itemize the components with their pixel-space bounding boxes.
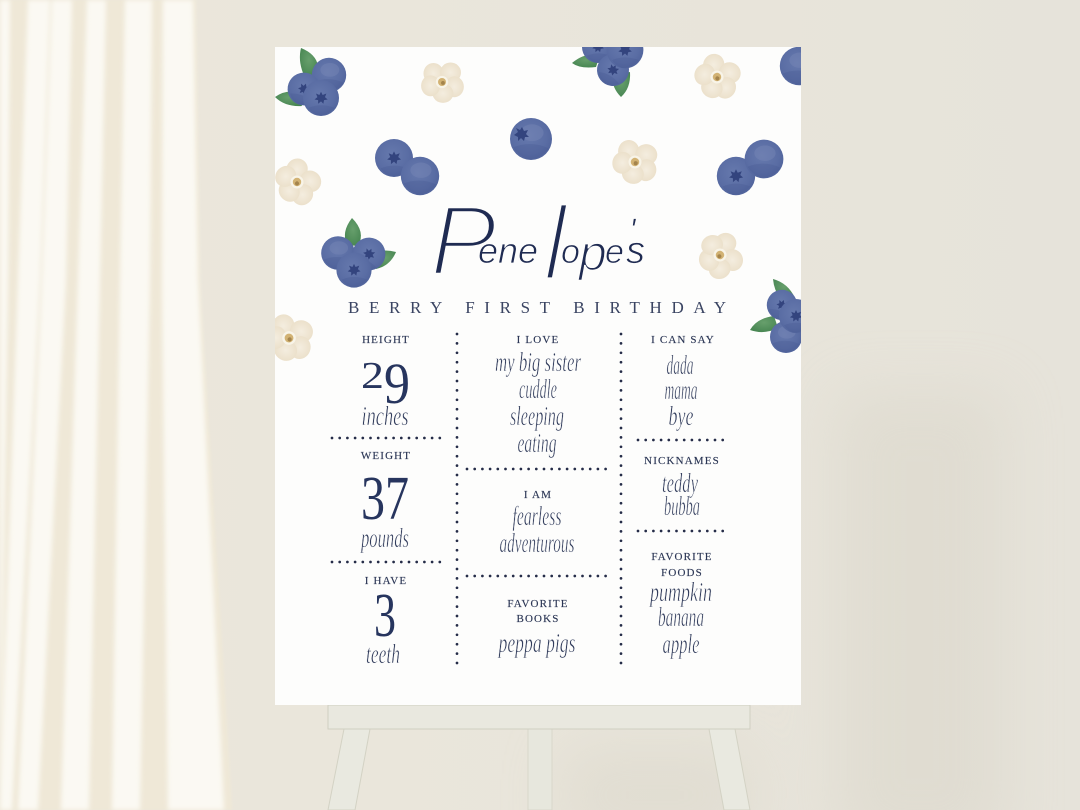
I can say block: mama	[664, 375, 698, 405]
I love block: sleeping	[510, 401, 564, 431]
favorite foods block: apple	[662, 629, 700, 659]
berry pair: left	[375, 139, 439, 195]
flower: top	[421, 63, 464, 103]
nicknames block: teddy	[662, 468, 698, 498]
title: s	[626, 230, 645, 272]
berry: top right	[780, 47, 801, 86]
I love block: I LOVE	[517, 334, 559, 346]
teeth block: 3	[374, 582, 396, 650]
height block: inches	[362, 401, 408, 431]
I can say block	[651, 334, 715, 431]
berry cluster: top centre	[572, 47, 644, 97]
easel right leg	[709, 729, 750, 810]
I can say block: bye	[668, 401, 694, 431]
weight block: WEIGHT	[361, 450, 411, 462]
favorite foods block: FOODS	[661, 567, 703, 579]
I can say block: dada	[666, 350, 694, 380]
easel middle leg	[528, 729, 552, 810]
favorite books block	[497, 598, 576, 658]
I love block: cuddle	[519, 374, 557, 404]
I can say block: I CAN SAY	[651, 334, 715, 346]
favorite books block: FAVORITE	[507, 598, 569, 610]
teeth block: teeth	[366, 639, 400, 669]
favorite books block: peppa pigs	[497, 628, 576, 658]
nicknames block: bubba	[664, 491, 700, 521]
wall shadow	[560, 390, 1005, 810]
title: P	[430, 185, 497, 297]
flower: right of title	[699, 232, 743, 279]
flower: left	[275, 158, 322, 206]
I am block: fearless	[512, 501, 562, 531]
I am block: I AM	[524, 489, 552, 501]
title: l	[543, 185, 569, 303]
I love block	[495, 334, 581, 458]
nicknames block: NICKNAMES	[644, 455, 720, 467]
I am block	[500, 489, 574, 558]
flower: left edge	[275, 314, 313, 361]
berry cluster: left of title	[321, 218, 396, 288]
poster panel	[259, 31, 818, 705]
easel crossbar	[328, 705, 750, 729]
favorite foods block	[649, 551, 713, 659]
height block: 2	[361, 355, 384, 397]
favorite foods block: banana	[658, 602, 704, 632]
column: measurements	[360, 334, 411, 669]
star on centre berry	[514, 127, 529, 141]
column: loves, traits, books	[495, 334, 581, 658]
favorite foods block: pumpkin	[649, 577, 712, 607]
weight block	[360, 450, 411, 553]
curtain	[0, 0, 232, 810]
column: words, nicknames, foods	[644, 334, 720, 659]
weight block: 37	[361, 465, 409, 533]
flower: top right	[694, 54, 741, 99]
height block: HEIGHT	[362, 334, 410, 346]
I love block: eating	[518, 428, 556, 458]
I am block: adventurous	[500, 528, 574, 558]
title: '	[629, 212, 637, 250]
easel	[328, 705, 750, 810]
nicknames block	[644, 455, 720, 521]
subtitle: BERRY FIRST BIRTHDAY	[348, 298, 726, 317]
favorite books block: BOOKS	[516, 613, 560, 625]
easel left leg	[328, 729, 370, 810]
berry pair: right	[717, 140, 783, 195]
berry: centre	[510, 118, 552, 160]
flower: centre right	[612, 140, 658, 184]
height block: 9	[384, 351, 410, 416]
berry cluster: top left	[275, 48, 346, 116]
weight block: pounds	[360, 523, 409, 553]
teeth block: I HAVE	[365, 575, 407, 587]
height block	[361, 334, 410, 431]
title: p	[577, 225, 607, 281]
column dividers	[332, 334, 727, 666]
title: ene	[478, 230, 538, 271]
favorite foods block: FAVORITE	[651, 551, 713, 563]
I love block: my big sister	[495, 347, 581, 377]
berry cluster: right edge	[750, 279, 801, 353]
title: e	[605, 233, 624, 271]
title: o	[561, 233, 580, 271]
teeth block	[365, 575, 407, 669]
watercolor decorations	[275, 47, 801, 361]
